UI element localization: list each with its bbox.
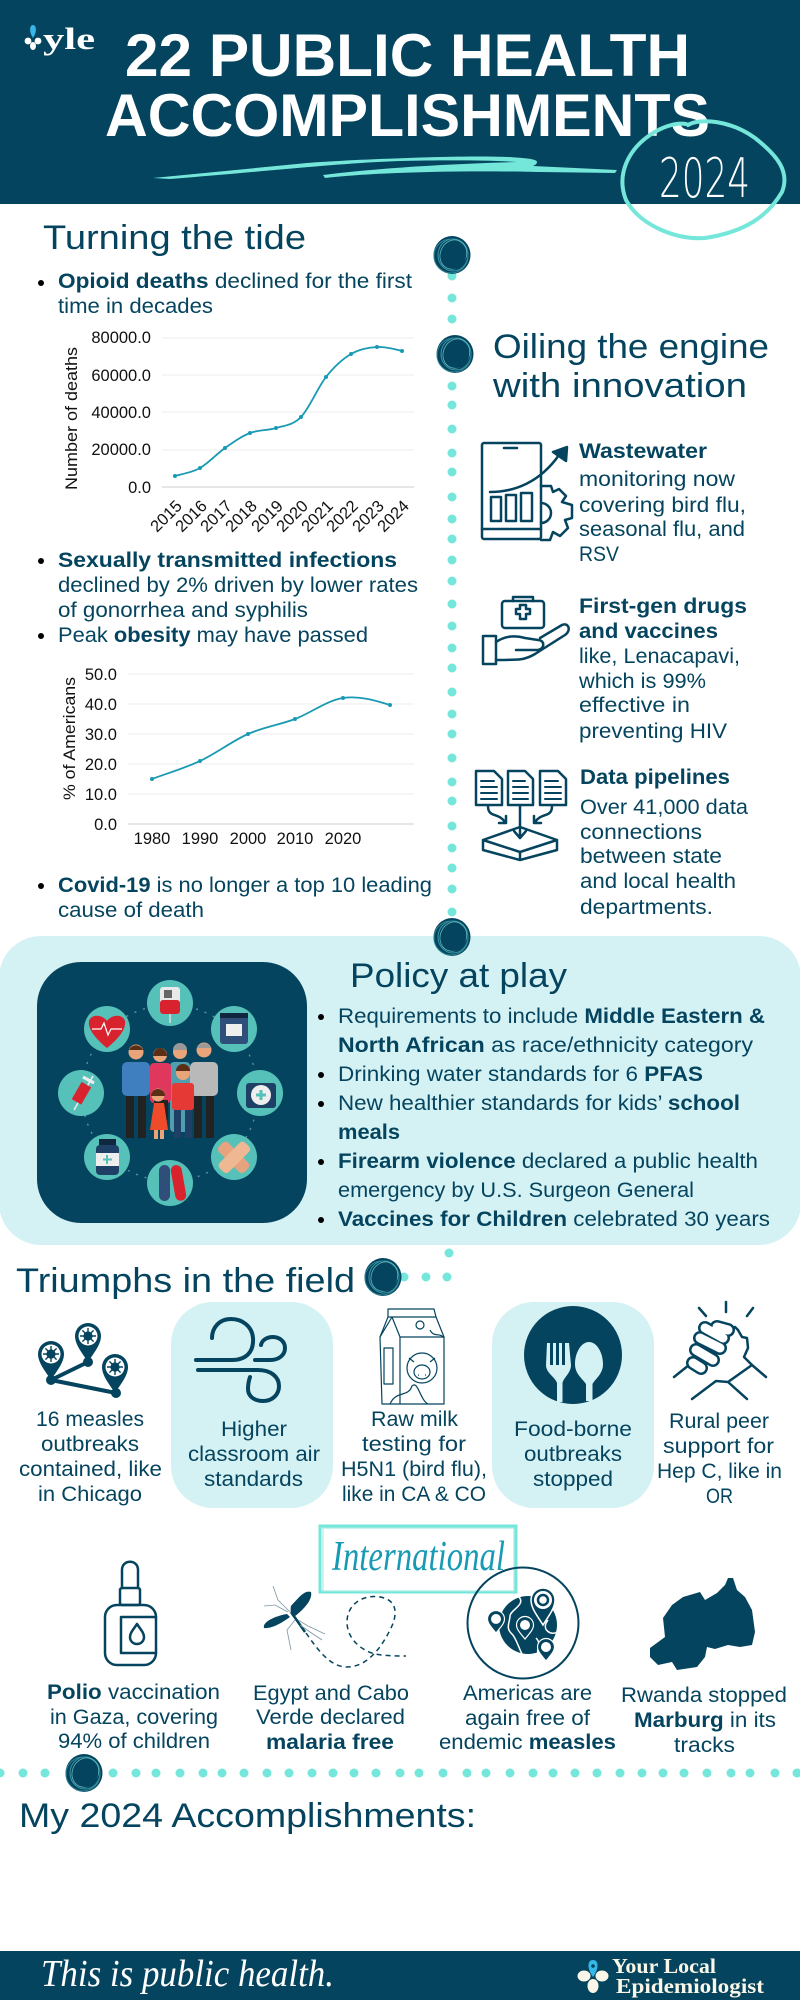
icon: blood bag [160,987,180,1023]
text: rural peer support: support for [663,1435,774,1458]
dotted timeline [0,276,797,1773]
panel: policy at play [0,936,800,1245]
icon: medicine bottle [96,1139,119,1175]
line chart: opioid deaths: 2021 [298,497,337,536]
text: rwanda [621,1684,787,1757]
logo: your local epidemiologist: Your Local [612,1954,716,1978]
text: rwanda: Marburg in its [634,1709,776,1732]
line chart: opioid deaths: 0.0 [128,479,151,497]
title: ACCOMPLISHMENTS [105,82,710,149]
brush underline [153,156,617,179]
text: first-gen drugs [578,595,747,743]
text: rural peer support [657,1410,782,1508]
text: measles: contained, like [19,1458,162,1481]
text: wastewater: monitoring now [579,468,736,491]
text: wastewater: seasonal flu, and [579,518,745,541]
line chart: obesity: 2000 [230,830,266,848]
text: data pipelines [580,766,748,919]
line chart: obesity: 10.0 [85,786,117,804]
bullet: sexually transmitted infections: declined by 2% driven by lower rates [58,574,418,597]
line chart: opioid deaths: 20000.0 [91,441,151,459]
tagline: This is public health. [41,1953,334,1995]
icon: heart [89,1016,125,1048]
icon: wastewater phone chart [482,443,572,540]
text: data pipelines: departments. [580,896,713,919]
text: measles [19,1408,162,1506]
title [105,22,710,149]
text: first-gen drugs: effective in [579,694,690,717]
text: food-borne [514,1418,632,1491]
bullet: sexually transmitted infections: of gonorrhea and syphilis [58,599,308,622]
year circle callout: 2024 [659,147,750,210]
line chart: obesity: 20.0 [85,756,117,774]
icon: handshake [674,1302,766,1399]
icon: jar [220,1013,248,1044]
text: americas [439,1682,616,1754]
text: rural peer support: Rural peer [669,1410,769,1433]
icon: measles outbreak pins [38,1323,128,1398]
card background: food-borne [492,1302,654,1508]
text: raw milk [341,1408,487,1506]
line chart: opioid deaths: 2022 [323,497,362,536]
line chart: obesity: 2020 [325,830,361,848]
text: egypt and cabo verde: Egypt and Cabo [253,1682,409,1705]
bullet: covid-19 [38,874,432,922]
line chart: obesity: 2010 [277,830,313,848]
label: international box [320,1526,516,1592]
text: rwanda: Rwanda stopped [621,1684,787,1707]
icon: data pipelines [476,771,566,860]
text: americas: Americas are [463,1682,592,1705]
text: higher classroom air: standards [204,1468,303,1491]
text: food-borne: stopped [533,1468,613,1491]
text: first-gen drugs: and vaccines [579,620,718,643]
line chart: obesity: 40.0 [85,696,117,714]
line chart: obesity: 0.0 [94,816,117,834]
policy bullets: Drinking water standards for 6 PFAS [338,1063,703,1086]
text: rural peer support: Hep C, like in [657,1460,782,1483]
icon: hand holding medical kit [483,597,569,664]
line chart: opioid deaths: 2019 [248,497,287,536]
icon: rwanda map [650,1578,755,1670]
text: higher classroom air: classroom air [188,1443,320,1466]
line chart: opioid deaths: 2017 [197,497,236,536]
text: polio: in Gaza, covering [50,1706,218,1729]
text: egypt and cabo verde [253,1682,409,1754]
text: polio: Polio vaccination [47,1681,220,1704]
icon: pills [159,1164,187,1202]
text: first-gen drugs: which is 99% [578,670,706,693]
text: rural peer support: OR [706,1485,733,1508]
card background: classroom air [171,1302,333,1508]
icon: wind [196,1319,285,1401]
policy bullets: Vaccines for Children celebrated 30 years [338,1208,770,1231]
icon: milk carton [380,1309,444,1404]
line chart: obesity: 30.0 [85,726,117,744]
bullet: opioid deaths [38,270,412,318]
icon: first aid case [246,1083,276,1108]
line chart: opioid deaths: 2024 [374,497,413,536]
text: higher classroom air: Higher [221,1418,287,1441]
line chart: obesity: 50.0 [85,666,117,684]
logo: your local epidemiologist: Epidemiologist [616,1974,764,1998]
panel: international [47,1526,787,1757]
text: measles: in Chicago [38,1483,142,1506]
bullet: covid-19: cause of death [58,899,204,922]
title: 22 PUBLIC HEALTH [125,22,690,89]
text: first-gen drugs: like, Lenacapavi, [579,645,740,668]
panel: turning the tide [38,219,432,922]
line chart: opioid deaths: 2020 [273,497,312,536]
text: measles: outbreaks [41,1433,139,1456]
knot marker 4 [364,1257,402,1296]
bullet: covid-19: Covid-19 is no longer a top 10 leading [58,874,432,897]
text: polio [47,1681,220,1753]
line chart: opioid deaths: Number of deaths [63,347,81,490]
knot marker 3 [434,917,471,956]
heading: policy at play: Policy at play [350,957,567,995]
panel: oiling the engine [476,328,769,919]
text: raw milk: like in CA & CO [342,1483,486,1506]
bullet: opioid deaths: time in decades [58,295,213,318]
illustration: family and health icons [37,962,307,1223]
policy bullets: North African as race/ethnicity category [338,1034,754,1057]
panel: triumphs in the field [16,1257,782,1508]
icon: bandages [216,1140,252,1175]
icon: mosquito with flight path [264,1586,406,1667]
line chart: obesity: 1990 [182,830,218,848]
logo: your local epidemiologist [578,1954,764,1998]
line chart: obesity [61,666,414,848]
knot marker 5 [66,1753,103,1792]
year circle callout [622,121,784,238]
line chart: opioid deaths: 2018 [222,497,261,536]
policy bullets: Firearm violence declared a public health [338,1150,758,1173]
heading: my 2024 accomplishments: My 2024 Accomplishments: [19,1797,476,1835]
policy bullets [318,1005,770,1231]
knot marker 1 [434,235,471,274]
line chart: opioid deaths: 2015 [147,497,186,536]
text: wastewater: Wastewater [579,440,707,463]
bullet: obesity: Peak obesity may have passed [58,624,368,647]
text: egypt and cabo verde: Verde declared [256,1706,405,1729]
icon: globe with pins [468,1568,578,1678]
bullet: sexually transmitted infections [38,549,418,622]
knot marker 2 [436,334,474,373]
text: measles: 16 measles [36,1408,144,1431]
policy bullets: New healthier standards for kids’ school [338,1092,740,1115]
line chart: opioid deaths: 60000.0 [91,367,151,385]
text: data pipelines: between state [580,845,722,868]
text: egypt and cabo verde: malaria free [266,1731,394,1754]
heading: triumphs in the field: Triumphs in the field [16,1262,355,1300]
text: first-gen drugs: First-gen drugs [579,595,747,618]
text: wastewater: covering bird flu, [579,494,746,517]
heading: oiling the engine with innovation [492,328,769,405]
line chart: opioid deaths: 40000.0 [91,404,151,422]
header banner [0,0,800,204]
text: raw milk: Raw milk [371,1408,459,1431]
text: americas: endemic measles [439,1731,616,1754]
icon: dropper bottle [105,1562,156,1665]
text: data pipelines: Over 41,000 data [580,796,748,819]
line chart: opioid deaths: 2016 [172,497,211,536]
footer [0,1951,800,2000]
text: data pipelines: Data pipelines [580,766,730,789]
icon: fork and spoon [524,1306,622,1404]
text: raw milk: H5N1 (bird flu), [341,1458,487,1481]
icon: syringe [72,1076,94,1110]
heading: turning the tide: Turning the tide [43,219,306,257]
policy bullets: emergency by U.S. Surgeon General [338,1179,694,1202]
illustration: family [122,1042,218,1139]
text: polio: 94% of children [58,1730,210,1753]
policy bullets: Requirements to include Middle Eastern & [338,1005,765,1028]
line chart: opioid deaths: 80000.0 [91,329,151,347]
text: food-borne: Food-borne [514,1418,632,1441]
text: americas: again free of [465,1707,590,1730]
text: wastewater [579,440,746,566]
text: higher classroom air [188,1418,320,1491]
heading: oiling the engine with innovation: with innovation [492,367,747,405]
policy bullets: meals [338,1121,400,1144]
text: wastewater: RSV [579,543,619,566]
label: international box: International [331,1534,505,1580]
line chart: obesity: 1980 [134,830,170,848]
text: first-gen drugs: preventing HIV [579,720,727,743]
bullet: opioid deaths: Opioid deaths declined for the first [58,270,412,293]
logo: yle: yle [43,21,95,56]
text: data pipelines: connections [580,821,702,844]
text: data pipelines: and local health [580,870,736,893]
line chart: obesity: % of Americans [61,677,79,800]
logo: yle [25,21,95,56]
text: raw milk: testing for [362,1433,466,1456]
text: food-borne: outbreaks [524,1443,622,1466]
heading: oiling the engine with innovation: Oiling the engine [493,328,769,366]
line chart: opioid deaths: 2023 [349,497,388,536]
bullet: sexually transmitted infections: Sexually transmitted infections [58,549,397,572]
line chart: opioid deaths [63,329,414,536]
text: rwanda: tracks [674,1734,735,1757]
